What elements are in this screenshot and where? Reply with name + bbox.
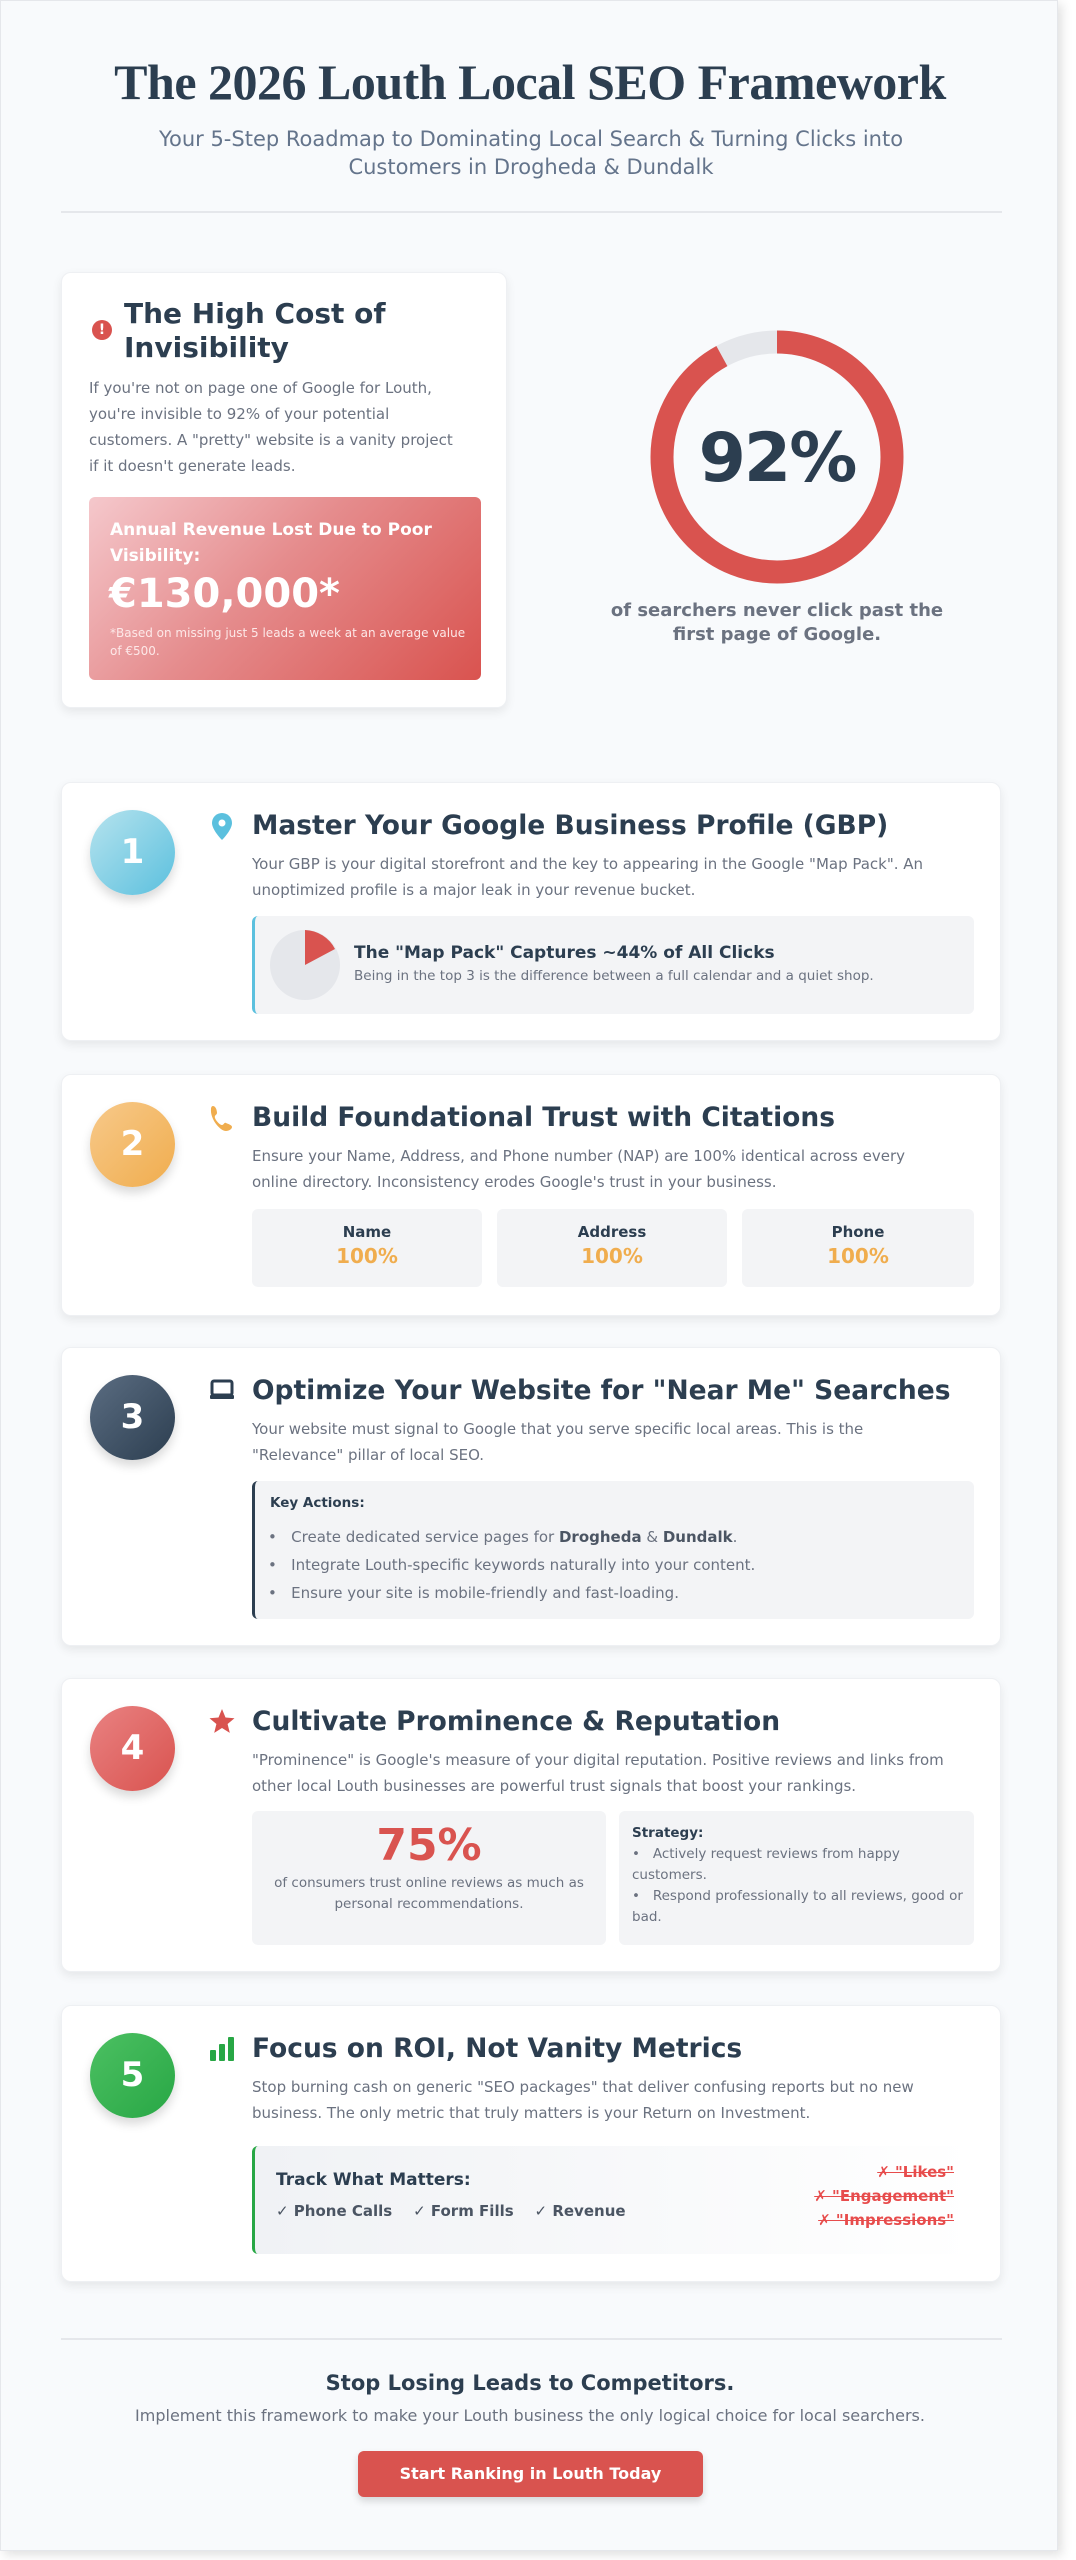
stat: name	[252, 1209, 482, 1287]
stat: name: Name	[343, 1223, 391, 1241]
chart: 92% donut: of searchers never click past the first page of Google.	[611, 600, 943, 645]
stat: 75%: of consumers trust online reviews as much as personal recommendations.	[274, 1875, 584, 1912]
strategy list	[619, 1811, 974, 1945]
heading: Focus on ROI, Not Vanity Metrics	[252, 2033, 742, 2064]
panel: high cost of invisibility	[61, 272, 507, 708]
callout: revenue lost: Annual Revenue Lost Due to Poor Visibility:	[110, 520, 432, 566]
panel: step 5	[61, 2005, 1001, 2282]
stat: address	[497, 1209, 727, 1287]
vanity metrics struck: ✗ "Impressions"	[818, 2211, 954, 2229]
icon: warning: !	[99, 322, 105, 338]
panel: step 1	[61, 782, 1001, 1041]
chart: 92% donut	[611, 330, 943, 645]
callout: map pack: Being in the top 3 is the difference between a full calendar and a quiet shop.	[354, 968, 874, 984]
callout: track what matters: Track What Matters:	[276, 2170, 471, 2190]
heading: The High Cost of Invisibility	[124, 297, 386, 364]
strategy list: • Actively request reviews from happy customers.	[632, 1846, 900, 1883]
callout: key actions: • Integrate Louth-specific keywords naturally into your content.	[268, 1556, 755, 1574]
stat: phone	[742, 1209, 974, 1287]
stat: phone: 100%	[827, 1244, 889, 1268]
strategy list: Strategy:	[632, 1825, 703, 1841]
heading: Build Foundational Trust with Citations	[252, 1102, 835, 1133]
chart: 92% donut: 92%	[699, 419, 855, 498]
callout: track what matters	[252, 2146, 974, 2254]
text block: Ensure your Name, Address, and Phone number (NAP) are 100% identical across every online directory. Inconsistency erodes Google's trust in your business.	[252, 1147, 905, 1191]
callout: revenue lost: €130,000*	[109, 571, 340, 617]
callout: revenue lost: *Based on missing just 5 leads a week at an average value of €500.	[110, 626, 465, 658]
icon: laptop	[210, 1380, 234, 1399]
step number 2: 2	[121, 1124, 144, 1164]
icon: warning	[92, 320, 112, 340]
strategy list: • Respond professionally to all reviews, good or bad.	[632, 1888, 963, 1925]
step number 1	[90, 810, 175, 895]
callout: map pack: The "Map Pack" Captures ~44% of All Clicks	[354, 943, 775, 963]
vanity metrics struck: ✗ "Engagement"	[814, 2187, 954, 2205]
icon: phone	[210, 1106, 232, 1131]
icon: star	[210, 1709, 234, 1733]
text block: Your website must signal to Google that you serve specific local areas. This is the "Relevance" pillar of local SEO.	[252, 1420, 863, 1464]
footer text: Implement this framework to make your Louth business the only logical choice for local searchers.	[135, 2406, 925, 2425]
text block: Your GBP is your digital storefront and the key to appearing in the Google "Map Pack". An unoptimized profile is a major leak in your revenue bucket.	[252, 855, 923, 899]
footer heading: Stop Losing Leads to Competitors.	[326, 2371, 734, 2395]
button: CTA	[358, 2451, 703, 2497]
step number 3: 3	[121, 1397, 144, 1437]
callout: key actions: Key Actions:	[270, 1495, 365, 1511]
heading: Optimize Your Website for "Near Me" Searches	[252, 1375, 951, 1406]
vanity metrics struck: ✗ "Likes"	[877, 2163, 954, 2181]
step number 1: 1	[121, 832, 144, 872]
callout: key actions	[252, 1481, 974, 1619]
text block: "Prominence" is Google's measure of your digital reputation. Positive reviews and links from other local Louth businesses are powerful trust signals that boost your rankings.	[252, 1751, 944, 1795]
callout: revenue lost	[89, 497, 481, 680]
stat: name: 100%	[336, 1244, 398, 1268]
panel: step 2	[61, 1074, 1001, 1316]
callout: map pack	[252, 916, 974, 1014]
heading: Cultivate Prominence & Reputation	[252, 1706, 780, 1737]
subtitle: Your 5-Step Roadmap to Dominating Local Search & Turning Clicks into Customers in Drogheda & Dundalk	[159, 127, 903, 179]
step number 5: 5	[121, 2055, 144, 2095]
vanity metrics struck	[814, 2163, 954, 2229]
step number 3	[90, 1375, 175, 1460]
text block: Stop burning cash on generic "SEO packages" that deliver confusing reports but no new business. The only metric that truly matters is your Return on Investment.	[252, 2078, 914, 2122]
stat: 75%: 75%	[376, 1820, 482, 1871]
stat: 75%	[252, 1811, 606, 1945]
icon: map pin	[212, 813, 232, 840]
stat: phone: Phone	[832, 1223, 884, 1241]
callout: key actions: • Ensure your site is mobile-friendly and fast-loading.	[268, 1584, 679, 1602]
step number 2	[90, 1102, 175, 1187]
stat: address: 100%	[581, 1244, 643, 1268]
title: The 2026 Louth Local SEO Framework	[114, 54, 946, 110]
chart: pie	[270, 930, 340, 1000]
callout: key actions: • Create dedicated service pages for Drogheda & Dundalk.	[268, 1528, 737, 1546]
step number 4: 4	[121, 1728, 144, 1768]
step number 4	[90, 1706, 175, 1791]
panel: step 3	[61, 1347, 1001, 1646]
text block: If you're not on page one of Google for Louth, you're invisible to 92% of your potential customers. A "pretty" website is a vanity project if it doesn't generate leads.	[89, 379, 453, 475]
heading: Master Your Google Business Profile (GBP)	[252, 810, 888, 841]
step number 5	[90, 2033, 175, 2118]
icon: bar chart	[210, 2037, 234, 2061]
stat: address: Address	[578, 1223, 646, 1241]
button: CTA: Start Ranking in Louth Today	[400, 2464, 661, 2483]
callout: track what matters: ✓ Phone Calls ✓ Form Fills ✓ Revenue	[276, 2202, 626, 2220]
panel: step 4	[61, 1678, 1001, 1972]
